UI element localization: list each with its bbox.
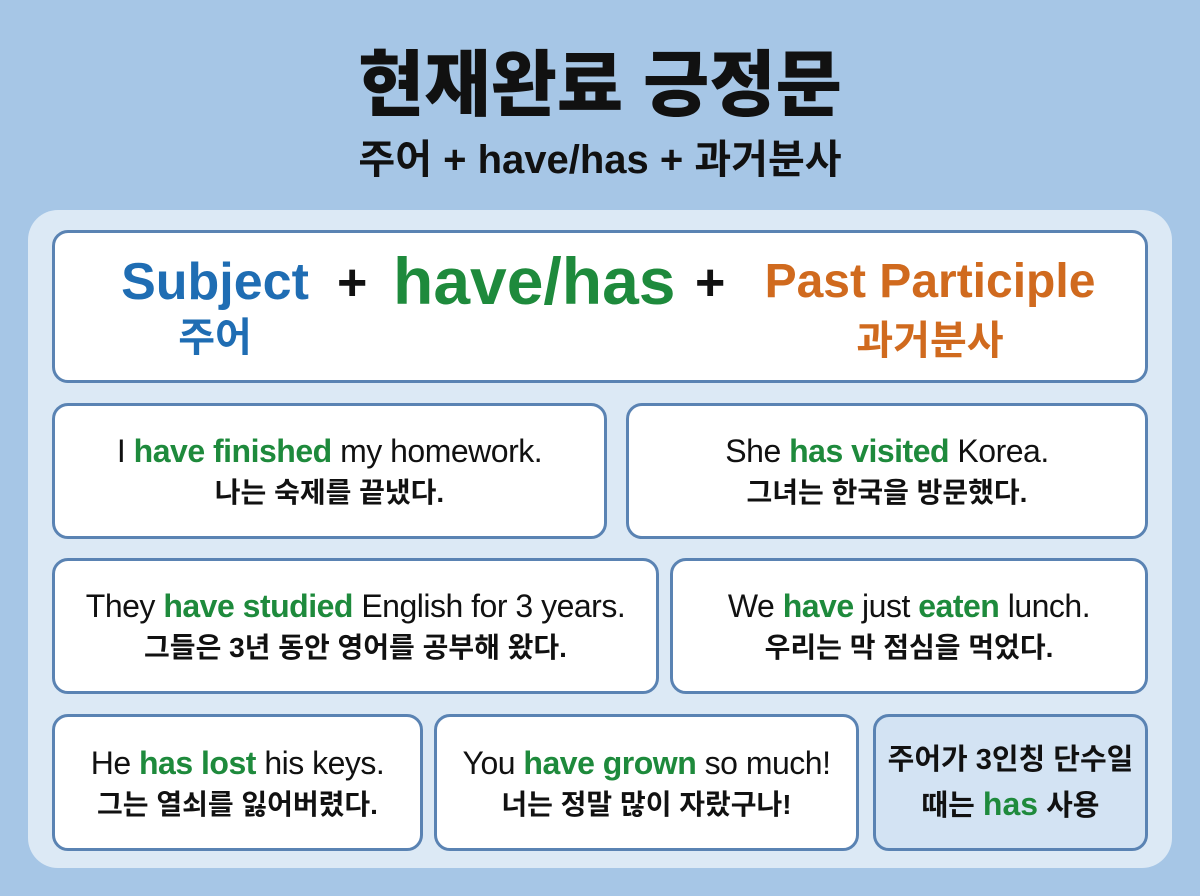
example 4	[670, 558, 1148, 694]
example 3	[52, 558, 659, 694]
plus 2: +	[695, 254, 725, 312]
example 3: 그들은 3년 동안 영어를 공부해 왔다.	[144, 632, 567, 663]
example 6: You have grown so much!	[463, 744, 830, 780]
subject: 주어	[178, 316, 252, 360]
note card: 때는 has 사용	[922, 786, 1099, 822]
note card	[873, 714, 1148, 851]
example 5	[52, 714, 423, 851]
example 2: She has visited Korea.	[725, 433, 1049, 469]
past participle: Past Participle	[765, 255, 1095, 308]
note card: 주어가 3인칭 단수일	[888, 744, 1133, 776]
example 3: They have studied English for 3 years.	[86, 588, 625, 624]
have/has: have/has	[393, 244, 676, 318]
plus 1: +	[337, 254, 367, 312]
subject: Subject	[121, 253, 309, 311]
example 5: 그는 열쇠를 잃어버렸다.	[97, 788, 378, 820]
formula card	[52, 230, 1148, 383]
example 1: 나는 숙제를 끝냈다.	[215, 477, 444, 508]
example 4: We have just eaten lunch.	[728, 588, 1090, 624]
example 1	[52, 403, 607, 539]
example 6: 너는 정말 많이 자랐구나!	[501, 788, 792, 820]
subject	[121, 253, 309, 360]
subtitle: 주어 + have/has + 과거분사	[358, 138, 842, 182]
example 1: I have finished my homework.	[117, 433, 542, 469]
title: 현재완료 긍정문	[358, 46, 842, 126]
example 5: He has lost his keys.	[91, 744, 384, 780]
example 2	[626, 403, 1148, 539]
past participle	[765, 255, 1095, 363]
example 2: 그녀는 한국을 방문했다.	[747, 477, 1027, 508]
past participle: 과거분사	[856, 319, 1004, 363]
example 6	[434, 714, 859, 851]
panel: main	[28, 210, 1172, 868]
example 4: 우리는 막 점심을 먹었다.	[765, 632, 1053, 663]
